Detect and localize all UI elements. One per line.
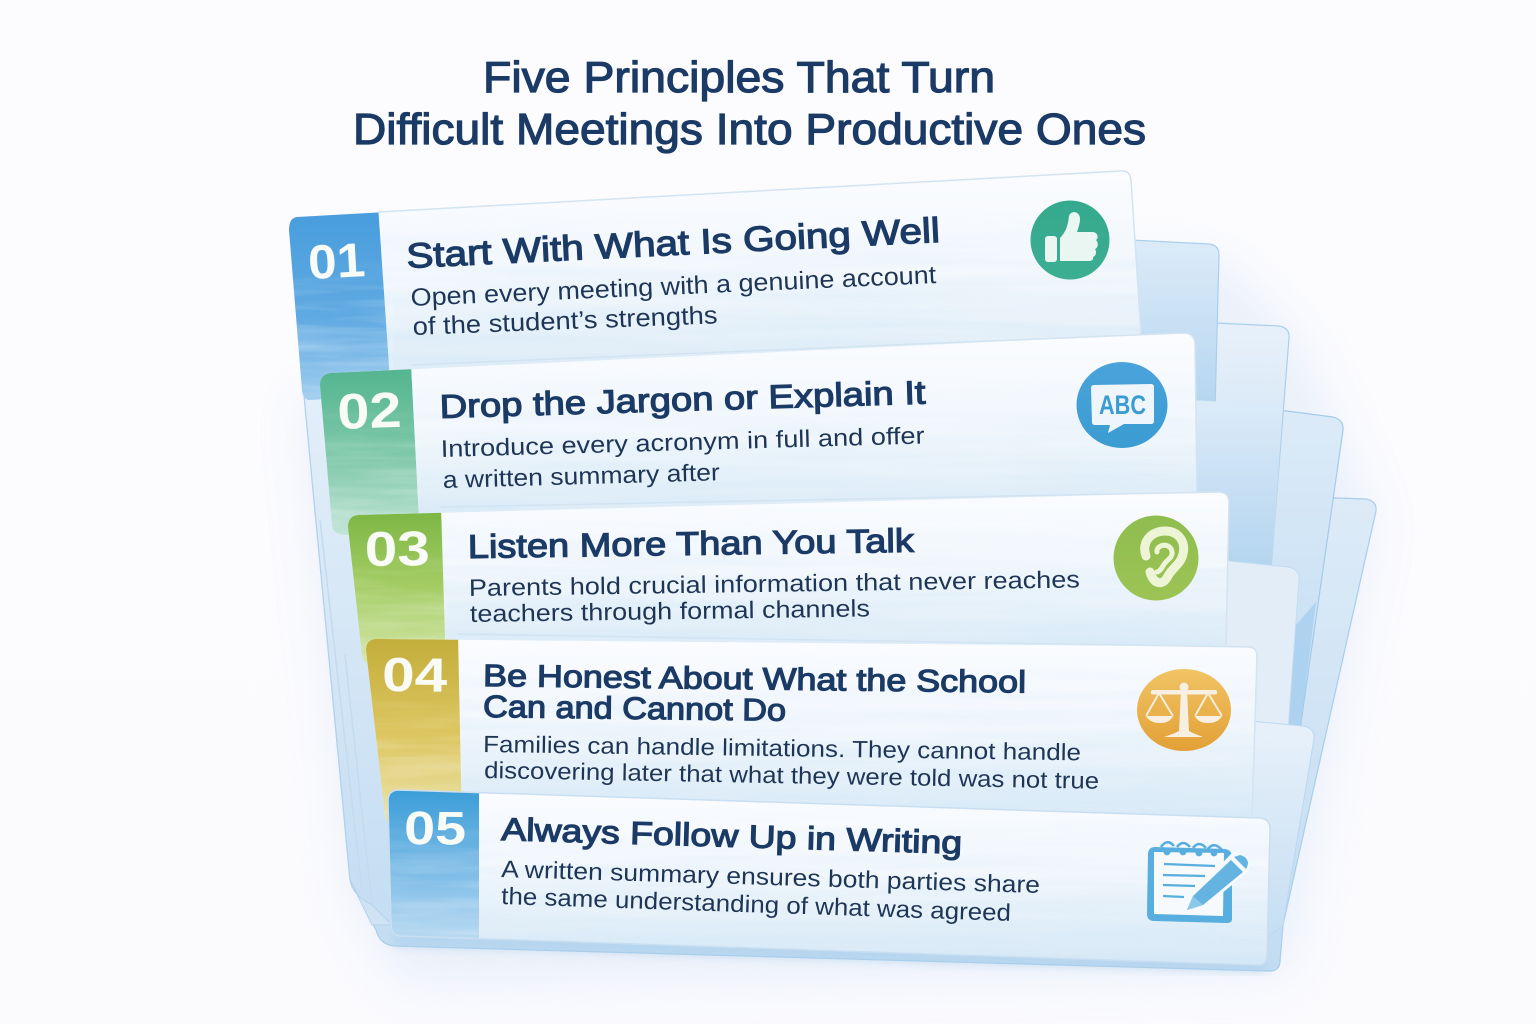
heading 1: Start With What Is Going Well	[405, 211, 941, 276]
sheet: extra left edges	[320, 520, 372, 905]
body 2	[440, 422, 925, 494]
heading 4	[483, 658, 1026, 728]
heading 4: Can and Cannot Do	[483, 689, 786, 728]
icon: ear	[1114, 516, 1198, 600]
icon: balance scales	[1137, 669, 1231, 751]
body 1: of the student’s strengths	[412, 301, 718, 341]
body 5: A written summary ensures both parties share	[501, 856, 1040, 899]
body 1: Open every meeting with a genuine account	[410, 261, 937, 312]
number 02: 02	[336, 382, 402, 440]
card 4	[350, 630, 1260, 830]
body 4	[483, 731, 1099, 794]
body 3: Parents hold crucial information that never reaches	[469, 566, 1080, 602]
sheet: deeper blue strip	[1284, 602, 1316, 730]
soft shadow behind the card stack	[300, 260, 1375, 985]
number 05: 05	[404, 801, 466, 855]
body 4: Families can handle limitations. They cannot handle	[483, 731, 1081, 765]
body 2: Introduce every acronym in full and offer	[440, 422, 925, 463]
card 2	[300, 330, 1200, 540]
number 01: 01	[307, 234, 366, 290]
number 03: 03	[364, 522, 430, 577]
body 5	[501, 856, 1040, 927]
icon: ABC speech bubble	[1076, 362, 1168, 448]
body 3: teachers through formal channels	[470, 595, 870, 628]
sheet: small panel beside card 3	[1220, 560, 1299, 730]
icon: ABC speech bubble: ABC	[1099, 390, 1146, 420]
card 5	[385, 786, 1275, 972]
sheet: small panel beside card 4	[1240, 720, 1314, 960]
title: Difficult Meetings Into Productive Ones	[353, 105, 1146, 154]
body 5: the same understanding of what was agreed	[501, 883, 1011, 927]
icon: thumbs up	[1030, 200, 1110, 280]
body 4: discovering later that what they were told was not true	[484, 757, 1099, 794]
sheet: third right panel	[1100, 405, 1343, 925]
heading 2: Drop the Jargon or Explain It	[439, 374, 926, 425]
icon: notepad and pencil	[1147, 842, 1251, 923]
sheet: second right panel	[1150, 320, 1289, 580]
body 1	[410, 261, 937, 341]
body 2: a written summary after	[442, 459, 720, 494]
heading 4: Be Honest About What the School	[483, 658, 1026, 700]
body 3	[469, 566, 1080, 628]
heading 5: Always Follow Up in Writing	[501, 811, 963, 861]
sheet: first right panel	[1130, 240, 1219, 410]
title: Five Principles That Turn	[483, 53, 995, 102]
card 3	[330, 488, 1235, 670]
back sheets fanned out behind the cards	[303, 240, 1376, 971]
heading 3: Listen More Than You Talk	[468, 522, 915, 565]
card 1	[270, 165, 1145, 410]
title	[353, 53, 1146, 154]
number 04: 04	[382, 649, 448, 703]
sheet: bottom folder and far right panel	[303, 300, 1376, 971]
sheet: left edge strips	[303, 385, 392, 925]
sheet: lighter middle panel	[1190, 400, 1283, 565]
